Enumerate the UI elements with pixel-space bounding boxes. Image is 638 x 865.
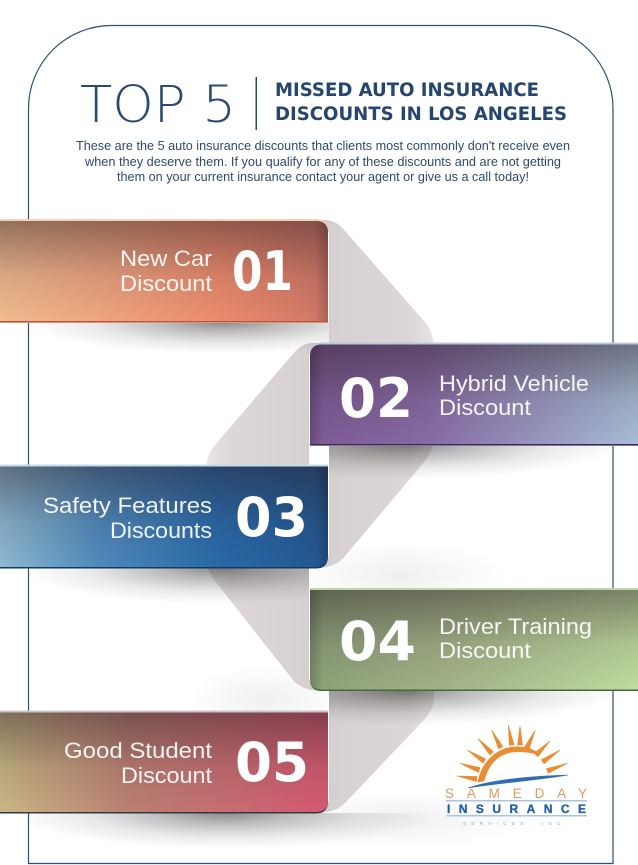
- panel: 05 Good Student Discount: Good Student: [64, 738, 212, 763]
- panel: 01 New Car Discount: [0, 219, 328, 323]
- title: TOP 5: TOP 5: [80, 76, 236, 135]
- panel: 01 New Car Discount: 01: [232, 240, 293, 303]
- heading: DISCOUNTS IN LOS ANGELES: [275, 103, 567, 125]
- intro text: when they deserve them. If you qualify for any of these discounts and are not getting: [84, 155, 561, 169]
- title divider: [256, 77, 257, 130]
- panel: 02 Hybrid Vehicle Discount: [310, 342, 638, 446]
- panel: 02 Hybrid Vehicle Discount: Discount: [439, 395, 531, 420]
- panel: 05 Good Student Discount: 05: [235, 731, 309, 794]
- icon: sun rays: [457, 725, 567, 782]
- icon: blue swoosh: [468, 775, 568, 788]
- panel: 03 Safety Features Discounts: [0, 464, 328, 568]
- bar shadows: [42, 322, 592, 844]
- ribbon fold: 01 to 03: [318, 220, 434, 568]
- panel: 04 Driver Training Discount: Driver Training: [439, 614, 592, 639]
- heading: MISSED AUTO INSURANCE: [275, 79, 539, 101]
- intro text: [76, 139, 570, 184]
- intro text: These are the 5 auto insurance discounts that clients most commonly don't receive even: [76, 139, 570, 153]
- logo wordmark: [445, 786, 587, 826]
- intro text: them on your current insurance contact your agent or give us a call today!: [117, 170, 529, 184]
- panel: 01 New Car Discount: New Car: [120, 246, 212, 271]
- panel: 03 Safety Features Discounts: Discounts: [110, 518, 212, 543]
- panel: 04 Driver Training Discount: [310, 588, 638, 691]
- logo wordmark: SAMEDAY: [445, 786, 587, 801]
- ribbon fold: 02 to 04: [206, 343, 320, 691]
- logo wordmark: INSURANCE: [447, 802, 586, 816]
- panel: 03 Safety Features Discounts: Safety Features: [43, 493, 212, 518]
- panel: 02 Hybrid Vehicle Discount: Hybrid Vehicle: [439, 371, 589, 396]
- panel: 01 New Car Discount: Discount: [120, 271, 212, 296]
- panel: 04 Driver Training Discount: 04: [339, 610, 416, 673]
- panel: 04 Driver Training Discount: Discount: [439, 638, 531, 663]
- panel: 02 Hybrid Vehicle Discount: 02: [339, 367, 413, 430]
- logo: Sameday Insurance: [445, 725, 587, 826]
- logo wordmark: SERVICES, INC.: [463, 821, 567, 826]
- ribbon fold: 04 to 05: [318, 690, 434, 813]
- heading: [275, 79, 567, 125]
- fold shadows: [185, 540, 530, 850]
- panel: 05 Good Student Discount: [0, 710, 328, 814]
- panel: 05 Good Student Discount: Discount: [121, 763, 212, 788]
- panel: 03 Safety Features Discounts: 03: [235, 486, 308, 549]
